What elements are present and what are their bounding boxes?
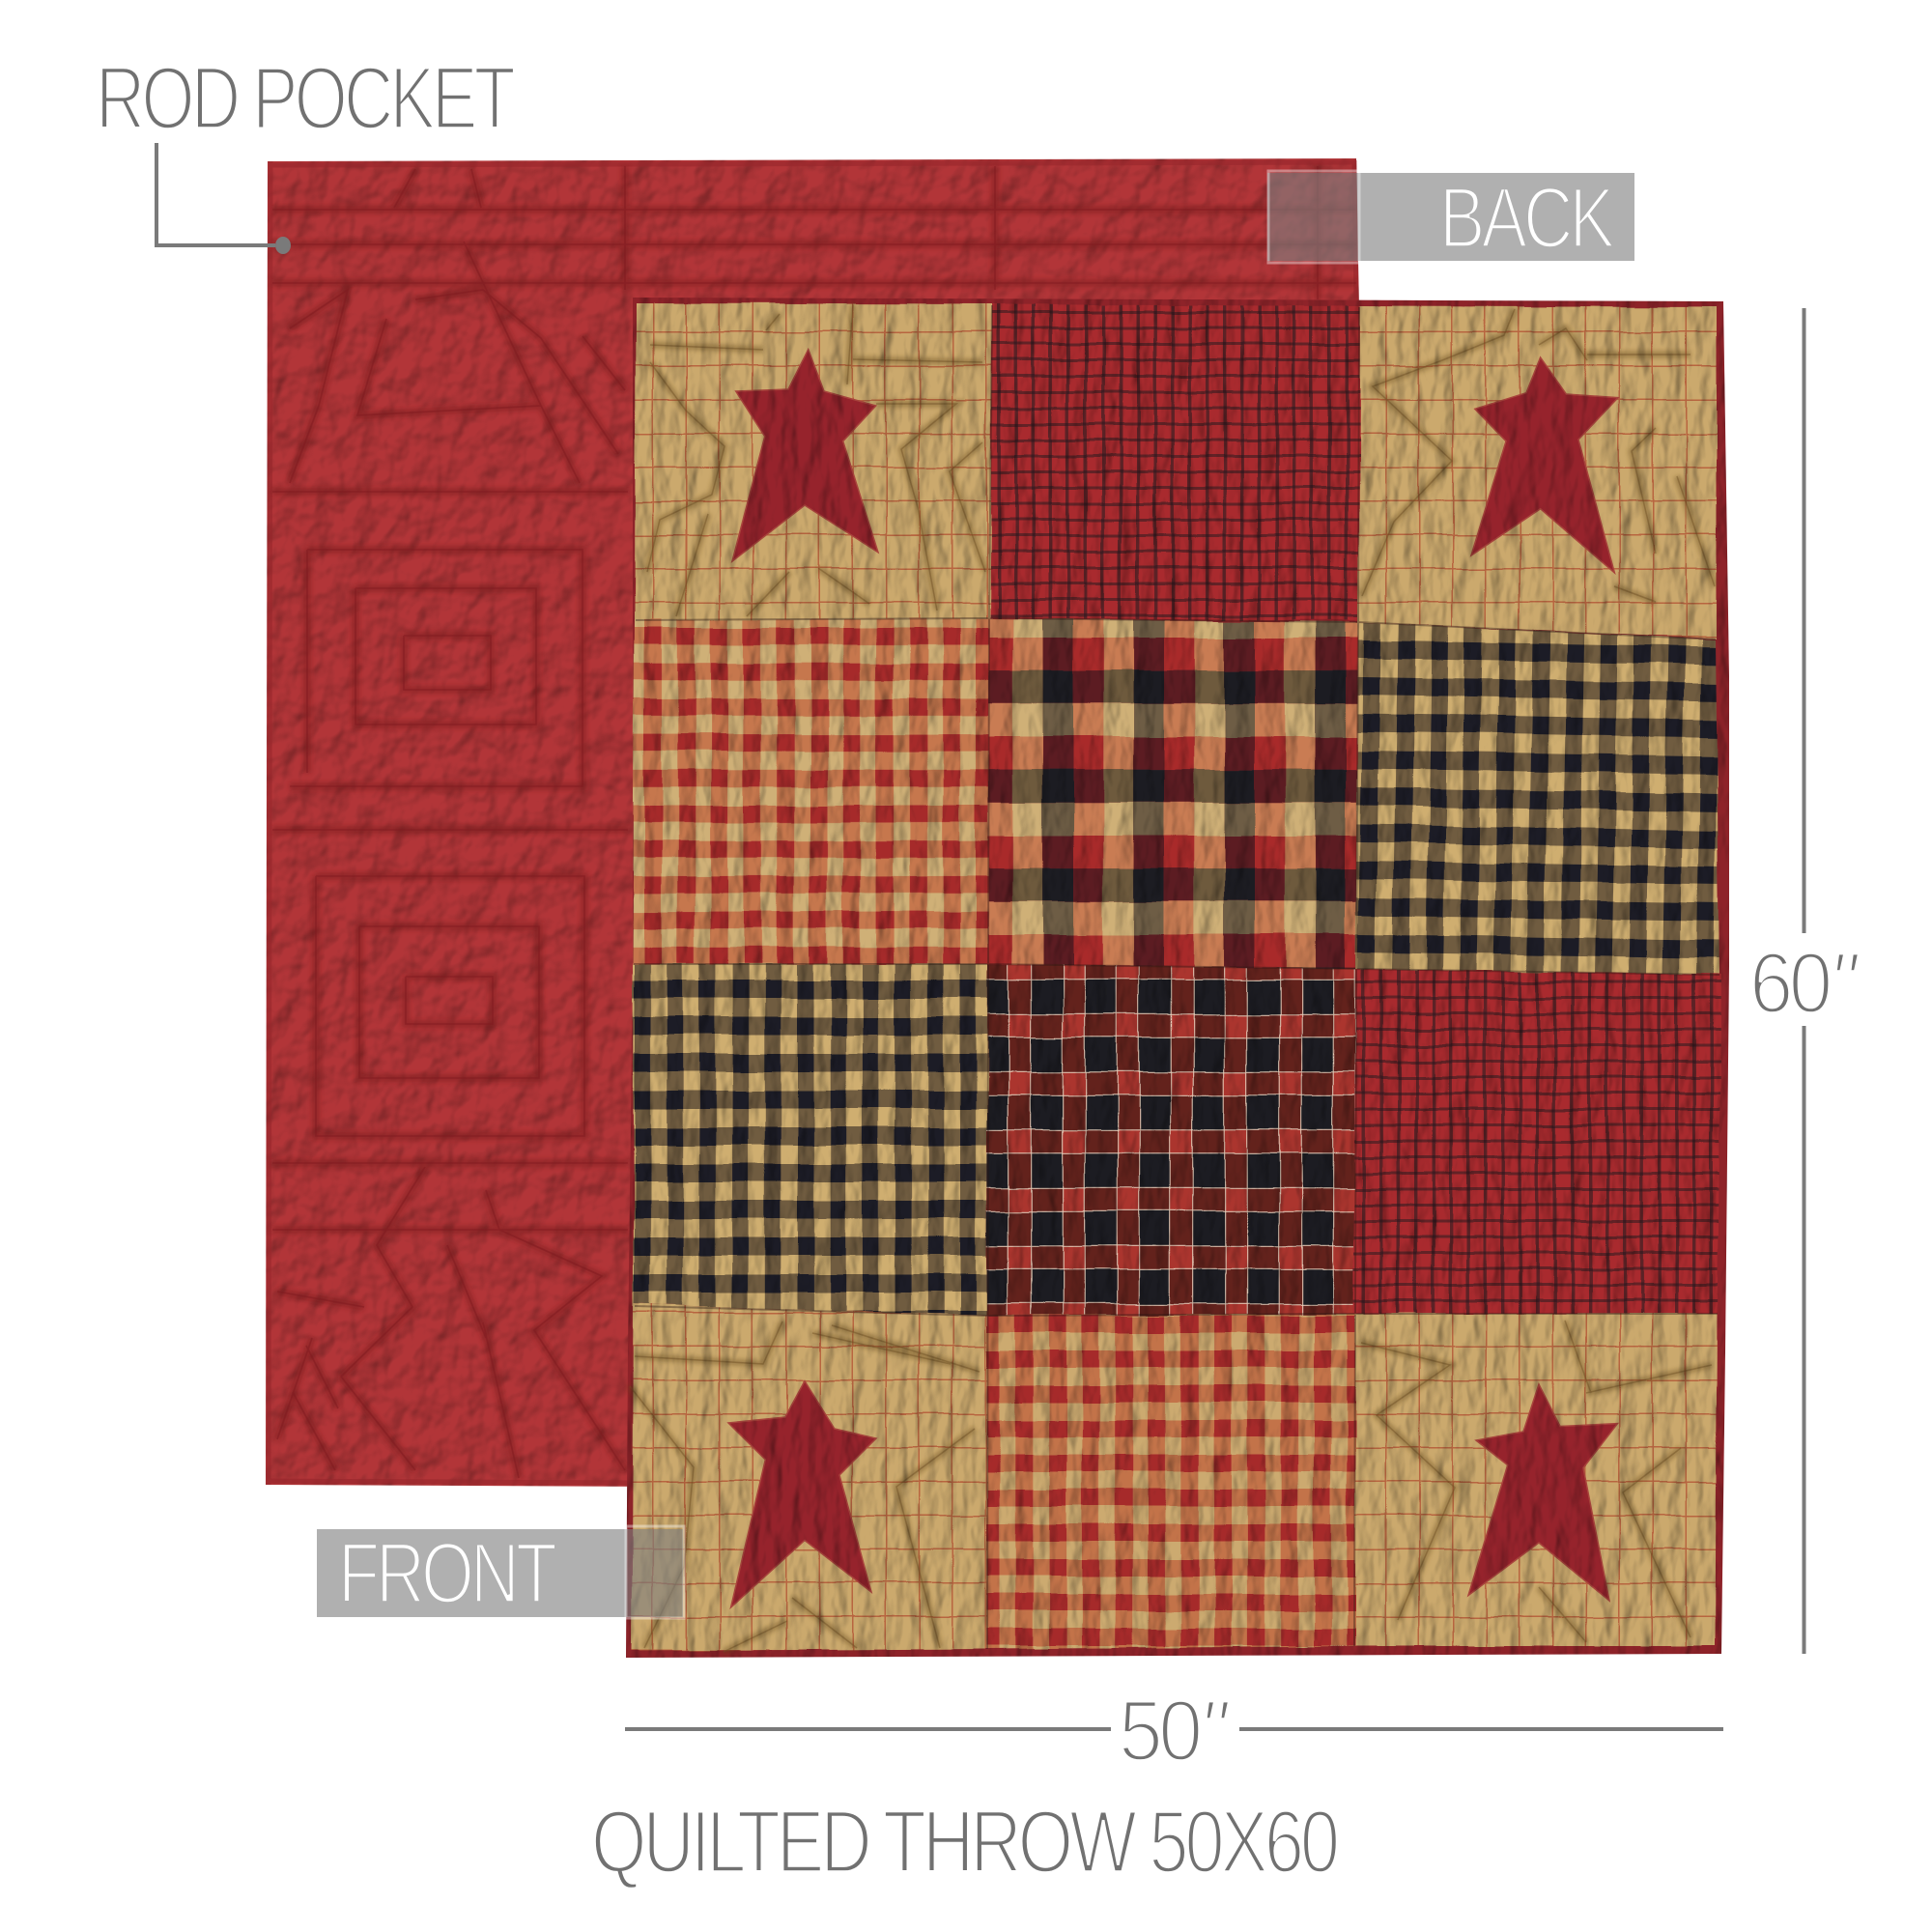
leader line: rod pocket: [156, 143, 291, 254]
seams between squares: [634, 305, 1719, 1649]
front binding: [626, 298, 1729, 1658]
square: fine red check top centre: [989, 304, 1360, 620]
label bar: front: [317, 1524, 684, 1621]
dimension: width 50 inches: 50": [1119, 1682, 1230, 1778]
label text: front: FRONT: [338, 1524, 556, 1621]
label: rod pocket: ROD POCKET: [96, 49, 515, 148]
back fabric: [266, 158, 1359, 1487]
title: QUILTED THROW 50X60: [591, 1793, 1337, 1891]
dimension: height 60 inches: 60": [1749, 934, 1860, 1031]
patchwork squares: [632, 303, 1721, 1651]
label text: back: BACK: [1439, 169, 1615, 266]
square: large plaid centre: [988, 618, 1358, 969]
square: tan star bottom right: [1355, 1314, 1718, 1646]
panel: back of quilt: [261, 155, 1362, 1492]
square: tan star top right: [1358, 306, 1717, 639]
icon: star bottom right: [1468, 1384, 1617, 1601]
quilting lines on tan squares: [630, 304, 1715, 1652]
square: red gingham bottom: [987, 1314, 1355, 1649]
icon: star bottom left: [728, 1381, 876, 1607]
back binding edges: [267, 160, 1356, 1485]
label bar: back: [1267, 169, 1634, 266]
icon: star top left: [732, 350, 878, 561]
icon: star top right: [1471, 357, 1618, 573]
back fabric wrinkles: [261, 155, 1362, 1492]
panel: front of quilt: [618, 290, 1739, 1671]
square: tartan centre: [987, 964, 1356, 1316]
front fabric wrinkles: [618, 290, 1739, 1671]
square: fine red check right: [1353, 969, 1721, 1314]
square: tan star top left: [635, 303, 992, 620]
square: black gingham right: [1356, 622, 1719, 975]
back quilting stitches: [272, 166, 1356, 1478]
square: tan star bottom left: [632, 1304, 987, 1651]
square: red gingham row two: [633, 618, 989, 964]
square: black gingham left: [633, 964, 988, 1316]
